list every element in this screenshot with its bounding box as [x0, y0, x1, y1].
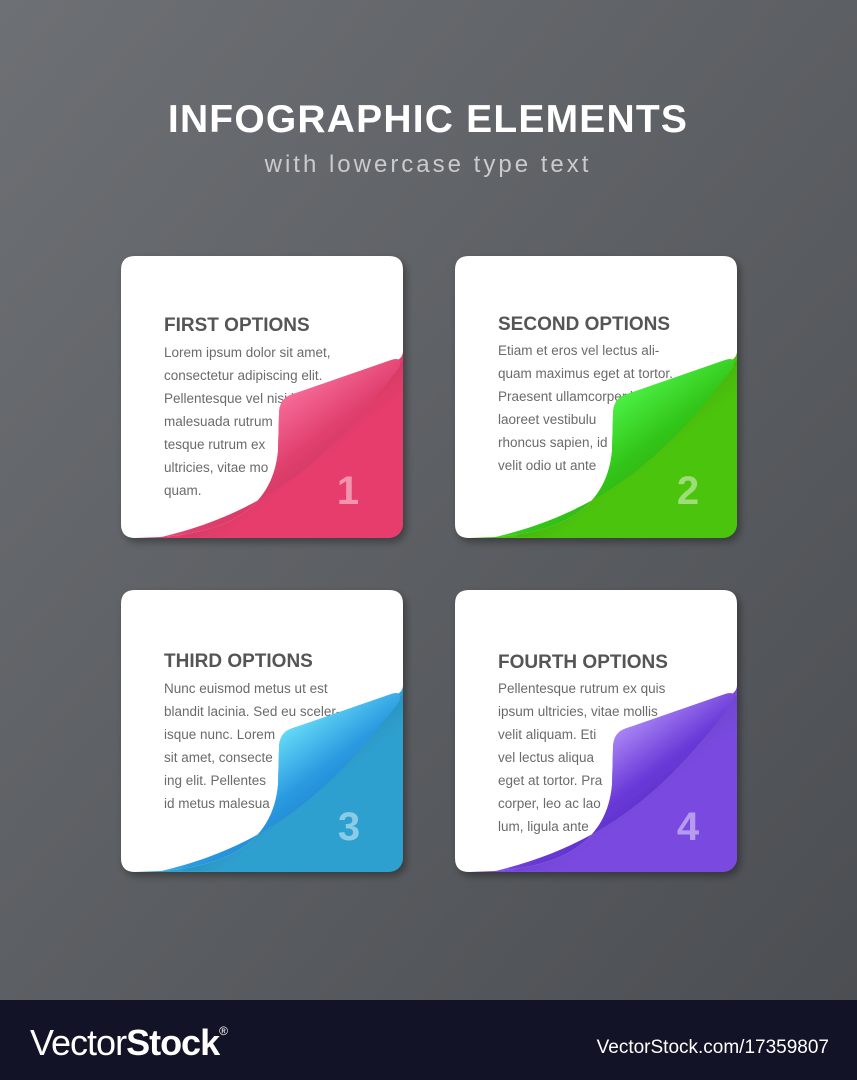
body text: velit aliquam. Eti — [498, 727, 596, 742]
body text: ultricies, vitae mo — [164, 460, 268, 475]
panel: fourth options — [455, 590, 737, 872]
body text: vel lectus aliqua — [498, 750, 595, 765]
number: 4 — [677, 805, 700, 849]
curled flap — [495, 359, 734, 537]
body text: tesque rutrum ex — [164, 437, 266, 452]
body text: Praesent ullamcorper leo — [498, 389, 648, 404]
body text: Nunc euismod metus ut est — [164, 681, 328, 696]
curled flap — [161, 693, 400, 871]
footer url: VectorStock.com/17359807 — [597, 1037, 829, 1058]
body text: Pellentesque vel nisi id — [164, 391, 301, 406]
body text: velit odio ut ante — [498, 458, 596, 473]
body text: blandit lacinia. Sed eu sceler- — [164, 704, 340, 719]
heading: THIRD OPTIONS — [164, 651, 313, 672]
body text: quam. — [164, 483, 202, 498]
body text: malesuada rutrum — [164, 414, 273, 429]
panel: third options — [121, 590, 403, 872]
body text: ipsum ultricies, vitae mollis — [498, 704, 658, 719]
body text: Etiam et eros vel lectus ali- — [498, 343, 659, 358]
body text: ing elit. Pellentes — [164, 773, 266, 788]
curled flap — [161, 359, 400, 537]
body text: isque nunc. Lorem — [164, 727, 275, 742]
body text: sit amet, consecte — [164, 750, 273, 765]
body text: eget at tortor. Pra — [498, 773, 603, 788]
footer logo: ® — [219, 1024, 228, 1038]
body text: laoreet vestibulu — [498, 412, 596, 427]
number: 1 — [337, 469, 359, 513]
number: 3 — [338, 805, 360, 849]
footer bar — [0, 1000, 857, 1080]
footer logo: VectorStock — [30, 1022, 219, 1063]
panel: first options — [121, 256, 403, 538]
body text: Pellentesque rutrum ex quis — [498, 681, 666, 696]
body text: quam maximus eget at tortor. — [498, 366, 673, 381]
number: 2 — [677, 469, 699, 513]
subtitle: with lowercase type text — [264, 151, 591, 178]
heading: SECOND OPTIONS — [498, 314, 670, 335]
heading: FOURTH OPTIONS — [498, 652, 668, 673]
body text: corper, leo ac lao — [498, 796, 601, 811]
panel: second options — [455, 256, 737, 538]
curled flap — [495, 693, 734, 871]
body text: consectetur adipiscing elit. — [164, 368, 322, 383]
body text: id metus malesua — [164, 796, 270, 811]
body text: rhoncus sapien, id — [498, 435, 608, 450]
body text: lum, ligula ante — [498, 819, 589, 834]
heading: FIRST OPTIONS — [164, 315, 310, 336]
body text: Lorem ipsum dolor sit amet, — [164, 345, 331, 360]
title: INFOGRAPHIC ELEMENTS — [168, 98, 688, 141]
